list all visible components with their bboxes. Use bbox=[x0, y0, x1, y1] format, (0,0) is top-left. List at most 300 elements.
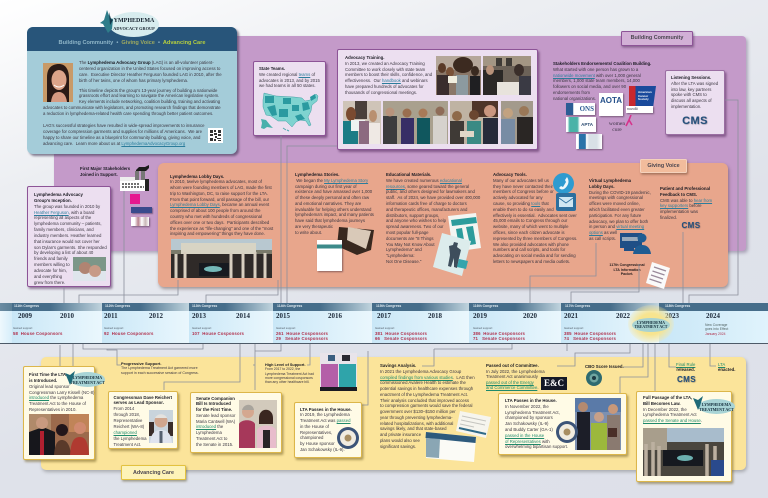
text: lymphedema lobby days: inspiring and empowering" things they have done. bbox=[170, 231, 265, 236]
text: first time LTA introduced: is Introduced. bbox=[29, 378, 57, 383]
logo mark bbox=[65, 371, 75, 385]
text: virtual lobby days: participation. For any future bbox=[589, 213, 641, 218]
text: timeline description: advocates to communicate with legislators, and promoting research findings that demonstrate bbox=[43, 105, 221, 110]
text: high level of support bbox=[265, 363, 314, 384]
text: lymphedema lobby days: Lymphedema Lobby Days. bbox=[170, 174, 224, 178]
text: listening sessions: discuss all aspects of bbox=[671, 98, 712, 103]
image: cosponsor charts bbox=[320, 353, 357, 391]
logo: E&C bbox=[541, 377, 567, 390]
text: patient and professional feedback: Patient and Professional bbox=[660, 186, 710, 191]
text: state teams: advocates in 2013, and by 2015 bbox=[259, 78, 320, 82]
text: lymphedema stories: existence and have amassed over 1,000 bbox=[295, 189, 372, 194]
coverage note 2024: goes into Effect bbox=[705, 327, 728, 331]
text: LAG inception: The group was founded in 2010 by bbox=[34, 204, 100, 209]
text: Reichert lead sponsor: through 2018, bbox=[114, 412, 140, 417]
logo: American Cancer Society bbox=[629, 86, 656, 106]
text: stakeholders endorsements: endorsements from bbox=[553, 90, 590, 95]
text: advocacy training: In 2013, we created an Advocacy Training bbox=[345, 61, 425, 66]
text: lymphedema lobby days: country who met with hundreds of congressional bbox=[170, 214, 262, 219]
text: senate companion bill: for the First Time. bbox=[196, 407, 232, 412]
text: virtual lobby days: which facilitated even greater bbox=[589, 207, 645, 212]
card: LTA passes in the House 2019 bbox=[294, 402, 362, 458]
text: savings analysis: compiled findings from various studies. LAG then bbox=[380, 374, 475, 380]
text: passed out of committee: Passed out of Committee. bbox=[486, 363, 539, 368]
card: congressman Reichert bbox=[108, 391, 178, 449]
text: Reichert lead sponsor: Treatment Act. bbox=[114, 442, 141, 447]
text: LAG inception: Lymphedema Advocacy bbox=[34, 192, 83, 197]
text: intro paragraph: The Lymphedema Advocacy Group (LAG) is an all-volunteer patient- bbox=[79, 60, 214, 65]
logo: women cure: women bbox=[609, 121, 625, 127]
text: LTA passes in the House 2019: Treatment Act was passed bbox=[300, 418, 350, 423]
text: advocacy tools: We also provided advocates with phone bbox=[493, 242, 569, 247]
photo: Senator Cantwell with advocate bbox=[238, 400, 276, 448]
text: LAG inception: family members, clinicians, and bbox=[34, 227, 94, 232]
logo: Lymphedema Advocacy Group bbox=[100, 10, 159, 37]
text: educational materials: "Lymphedema: bbox=[386, 253, 415, 258]
photo: Dave Reichert bbox=[149, 410, 173, 443]
photo: advocates meeting bbox=[483, 56, 531, 95]
logo ellipse: LYMPHEDEMA bbox=[73, 374, 102, 380]
text: strategies paragraph: LAG's successful strategies have resulted in wide-spread improvements to insurance bbox=[43, 123, 205, 128]
text: advocacy tools: actively advocated for any bbox=[493, 195, 543, 200]
text: LTA enacted: enacted. bbox=[718, 367, 735, 372]
text: Reichert lead sponsor: Representative bbox=[114, 418, 142, 423]
text: first time LTA introduced: Treatment Act to the House of bbox=[29, 401, 86, 406]
text: first time LTA introduced: First Time the LTA bbox=[29, 372, 66, 377]
support 116th: Gained support: bbox=[473, 326, 493, 330]
text: full passage of the LTA: Bill Becomes Law. bbox=[643, 401, 681, 406]
text: LAG inception: Heather Ferguson, with a board bbox=[34, 210, 94, 215]
year 2010: 2010 bbox=[60, 312, 74, 320]
heading tab: building community: Building Community bbox=[631, 35, 683, 41]
text: LTA enacted: LTA bbox=[718, 362, 725, 367]
text: LAG inception: that insurance would not cover her bbox=[34, 239, 100, 244]
text: senate companion bill: the Senate in 2015. bbox=[196, 442, 233, 447]
text: state teams bbox=[259, 66, 320, 88]
text: LTA enacted bbox=[718, 363, 735, 373]
logo: American Cancer Society: Cancer bbox=[638, 94, 648, 98]
text: savings analysis: commissioned Avalere Health to estimate the bbox=[380, 380, 466, 385]
text: congressional information packet: LTA Information bbox=[613, 268, 641, 272]
text: LTA passes in the House 2019: Jan Schakowsky (IL-9). bbox=[300, 447, 345, 452]
text: lymphedema stories: to write about. bbox=[295, 230, 322, 234]
text: stakeholders endorsements: What started with one person has grown to a bbox=[553, 67, 638, 72]
text: state teams: State Teams. bbox=[259, 66, 285, 71]
text: CBO score issued: CBO Score Issued. bbox=[585, 364, 624, 369]
text: educational materials: distributors, support groups, bbox=[386, 213, 439, 218]
text: advocacy tools: website, many of which went to multiple bbox=[493, 224, 568, 229]
logo: ONS: ONS bbox=[580, 105, 594, 113]
text: senate companion bill: introduced the bbox=[196, 424, 223, 429]
text: virtual lobby days: Lobby Days. bbox=[589, 184, 615, 189]
text: advocacy tools: Advocacy Tools. bbox=[493, 172, 527, 177]
support 117th: Gained support: bbox=[564, 326, 584, 330]
card: advocacy training bbox=[337, 49, 538, 150]
text: educational materials: Educational Materials. bbox=[386, 172, 431, 177]
timeline bar bbox=[0, 303, 768, 344]
text: lymphedema stories: campaign during our first year of bbox=[295, 184, 357, 188]
logo: CMS: CMS bbox=[682, 115, 708, 127]
text: high level of support: From 2017 to 2022, the bbox=[265, 367, 300, 371]
text: LAG inception: and everything bbox=[34, 274, 62, 279]
text: advocacy tools: 45,000 emails to Congress through our bbox=[493, 218, 567, 223]
text: lymphedema lobby days: In 2010, twelve lymphedema advocates, most of bbox=[170, 179, 262, 184]
text: educational materials: documents are "8 Things bbox=[386, 236, 434, 241]
text: advocacy tools: they have never contacted their bbox=[493, 184, 553, 189]
logo ellipse: LYMPHEDEMA bbox=[702, 402, 731, 406]
text: senate companion bill bbox=[196, 396, 235, 448]
text: savings analysis: Their analysis concluded that improved access bbox=[380, 398, 469, 402]
text: final rule released: released. bbox=[676, 367, 695, 372]
text: patient and professional feedback bbox=[660, 186, 712, 220]
logo ellipse bbox=[70, 372, 105, 387]
text: Reichert lead sponsor bbox=[114, 394, 172, 448]
text: lymphedema lobby days bbox=[170, 174, 274, 236]
support 114th: 261 House Cosponsors bbox=[276, 330, 328, 336]
text: final rule released: Final Rule bbox=[676, 362, 695, 367]
text: educational materials: Not One Disease." bbox=[386, 259, 421, 264]
text: stakeholders endorsements: national organizations. bbox=[553, 96, 596, 100]
text: advocacy tools: letters to newspapers and media outlets. bbox=[493, 259, 570, 264]
text: senate companion bill: Maria Cantwell (WA) bbox=[196, 419, 235, 424]
logo: CMS: CMS bbox=[682, 221, 700, 230]
text: advocacy training bbox=[345, 55, 432, 95]
text: educational materials: You May Not Know About bbox=[386, 242, 435, 247]
card: LTA passes in the House 2022 bbox=[498, 393, 627, 455]
icon: pink ribbon bbox=[625, 115, 633, 126]
text: savings analysis: plans would also see bbox=[380, 438, 420, 443]
text: listening sessions: spoke with CMS to bbox=[671, 92, 707, 97]
text: LTA passes in the House 2022 bbox=[505, 398, 568, 450]
text: stakeholders endorsements: nationwide movement with over 1,000 general bbox=[553, 72, 641, 78]
text: first major stakeholders: First Major Stakeholders bbox=[80, 166, 130, 171]
text: virtual lobby days: During the COVID-19 pandemic, bbox=[589, 190, 651, 195]
header band with tagline: Building Community • Giving Voice • Advancing Care bbox=[59, 40, 205, 46]
text: passed out of committee: In July 2022, the Lymphedema bbox=[486, 368, 545, 374]
badge label ellipse bbox=[632, 318, 670, 332]
text: first time LTA introduced: Congressman Larry Kissell (NC-8) bbox=[29, 390, 94, 395]
text: lymphedema lobby days: whom were founding members of LAG, made the first bbox=[170, 185, 272, 190]
114th congress label: 114th Congress bbox=[277, 304, 302, 308]
text: lymphedema lobby days: offices over one or two days. Participants described bbox=[170, 220, 269, 225]
text: LAG inception: Group's Inception. bbox=[34, 198, 72, 203]
text: lymphedema stories: have said that lymphedema journeys bbox=[295, 218, 365, 223]
logo: white diamond sponsor bbox=[576, 134, 602, 149]
support 116th: 71 Senate Cosponsors bbox=[473, 336, 525, 340]
logo: women cure bbox=[608, 115, 633, 132]
text: educational materials: information cards free of charge to doctors bbox=[386, 201, 467, 206]
logo butterfly mark bbox=[100, 10, 113, 33]
badge label ellipse: LYMPHEDEMA bbox=[637, 320, 665, 324]
text: passed out of committee bbox=[486, 363, 545, 390]
logo: E&C: E&C bbox=[544, 378, 564, 388]
text: full passage of the LTA: In December 2022, the bbox=[643, 407, 687, 412]
text: educational materials: and therapeutic offices, manufacturers and bbox=[386, 207, 467, 212]
logo: AOTA: AOTA bbox=[600, 96, 622, 105]
logo ellipse: TREATMENT ACT bbox=[70, 380, 105, 384]
year 2017: 2017 bbox=[377, 312, 391, 320]
text: advocacy tools: effectively is essential. Advocates sent over bbox=[493, 213, 577, 218]
115th congress label: 115th Congress bbox=[376, 304, 401, 308]
text: progressive support bbox=[121, 362, 199, 375]
text: savings analysis: significant savings. bbox=[380, 444, 416, 448]
coverage note 2024: January 2024 bbox=[705, 332, 726, 336]
text: educational materials: spread awareness. Two of our bbox=[386, 224, 443, 229]
icon: mail bbox=[556, 193, 576, 211]
year 2013: 2013 bbox=[192, 312, 206, 320]
text: LTA passes in the House 2022: passed in the House bbox=[505, 433, 544, 438]
text: LAG inception: advocate for him, bbox=[34, 268, 67, 273]
text: savings analysis: In 2021 the Lymphedema Advocacy Group bbox=[380, 369, 461, 374]
logo badge ellipse bbox=[109, 12, 159, 37]
image: lymphedema body handout bbox=[433, 233, 471, 276]
support 113th bbox=[192, 324, 252, 334]
text: strategies paragraph: advancing care. Learn more about us at LymphedemaAdvocacyGroup.org bbox=[43, 141, 185, 146]
text: full passage of the LTA: Full Passage of the LTA, bbox=[643, 395, 692, 400]
text: Reichert lead sponsor: From 2014 bbox=[114, 406, 134, 411]
support 111th: Gained support: bbox=[13, 326, 33, 330]
year 2018: 2018 bbox=[428, 312, 442, 320]
text: patient and professional feedback: key supporters before bbox=[660, 203, 702, 208]
text: LAG inception: industry members. Heather learned bbox=[34, 233, 101, 238]
photo: twin babies bbox=[73, 257, 106, 281]
text: LTA passes in the House 2022: LTA Passes in the House. bbox=[505, 398, 557, 403]
text: advocacy tools: offices, since each citizen advocate is bbox=[493, 230, 565, 235]
tab: advancing care: Advancing Care bbox=[133, 470, 174, 476]
logo: white sponsor bbox=[131, 217, 149, 226]
text: full passage of the LTA: Lymphedema Treatment Act bbox=[643, 412, 697, 417]
text: savings analysis: potential savings in healthcare expenses through bbox=[380, 386, 473, 391]
text: senate companion bill: Senate lead sponsor bbox=[196, 413, 235, 418]
year 2011: 2011 bbox=[104, 312, 118, 320]
year 2012: 2012 bbox=[149, 312, 163, 320]
photo: lobby day group at Capitol bbox=[171, 239, 272, 278]
text: lymphedema stories: of these deeply personal and often raw bbox=[295, 195, 369, 200]
text: educational materials: most popular full-page bbox=[386, 230, 429, 235]
support 116th: 386 House Cosponsors bbox=[473, 330, 525, 336]
text: virtual lobby days: Virtual Lymphedema bbox=[589, 178, 631, 183]
text: senate companion bill: Senate Companion bbox=[196, 396, 235, 400]
text: LTA passes in the House 2022: Lymphedema Treatment Act, bbox=[505, 410, 560, 415]
text: senate companion bill: Treatment Act to bbox=[196, 436, 227, 441]
text: advocacy training: Advocacy Training. bbox=[345, 55, 384, 60]
support 117th bbox=[564, 324, 624, 340]
text: progressive support: The Lymphedema Treatment Act garnered more bbox=[121, 366, 198, 370]
text: timeline description bbox=[43, 88, 221, 116]
photo: advocates with congressman bbox=[501, 101, 533, 144]
text: intro paragraph: birth of her twins, one of whom has primary lymphedema. bbox=[79, 78, 188, 83]
panel: giving voice bbox=[158, 163, 728, 287]
photo: advocates group bbox=[383, 101, 448, 144]
logo badge ellipse: ADVOCACY GROUP bbox=[113, 26, 155, 31]
card: senate companion bill bbox=[190, 392, 282, 453]
text: high level of support: more congressional cosponsors bbox=[265, 376, 313, 380]
113th congress label: 113th Congress bbox=[192, 304, 217, 308]
text: LAG inception bbox=[34, 192, 107, 285]
text: savings analysis: government over $130–$150 million per bbox=[380, 409, 456, 414]
text: timeline description: Key elements include networking, coalition building, training and activating bbox=[79, 99, 220, 104]
text: LAG inception: grew from there. bbox=[34, 280, 65, 285]
text: advocacy training: Committee to work closely with state team bbox=[345, 66, 425, 72]
logo mark bbox=[693, 396, 703, 410]
card: listening sessions bbox=[665, 70, 725, 135]
panel: building community bbox=[54, 36, 746, 251]
logo: ONS bbox=[566, 103, 595, 115]
support 114th: Gained support: bbox=[276, 326, 296, 330]
support 111th bbox=[13, 326, 63, 336]
logo ellipse bbox=[698, 399, 735, 414]
year 2023: 2023 bbox=[665, 312, 679, 320]
text: lymphedema lobby days: the experience as "life-changing" and one of the "most bbox=[170, 226, 273, 231]
text: stakeholders endorsements: members, 1,000 state team members, 14,000 bbox=[553, 78, 640, 83]
text: timeline description: This timeline depicts the group's 13-year journey of building a nationwide bbox=[79, 88, 217, 92]
heading tab: giving voice bbox=[640, 159, 687, 173]
text: LTA passes in the House 2022: In November 2022, the bbox=[505, 404, 549, 409]
text: Reichert lead sponsor: Reichert (WA-8) bbox=[114, 424, 144, 429]
support 114th: 29 Senate Cosponsors bbox=[276, 336, 328, 340]
support 113th: 107 House Cosponsors bbox=[192, 330, 244, 336]
photo: advocates with bison bbox=[436, 56, 481, 95]
year 2009: 2009 bbox=[18, 312, 32, 320]
photo: advocates shaking hands bbox=[450, 101, 498, 144]
coverage note 2024: New Coverage bbox=[705, 323, 727, 327]
image: story cover bbox=[317, 240, 342, 271]
year 2024: 2024 bbox=[706, 312, 720, 320]
support 115th: Gained support: bbox=[375, 326, 395, 330]
text: progressive support: Progressive Support. bbox=[121, 361, 161, 366]
text: intro paragraph: care. Executive Director Heather Ferguson founded LAG in 2010, after the bbox=[79, 72, 222, 77]
text: Reichert lead sponsor: serves as Lead Sponsor. bbox=[114, 400, 164, 405]
text: progressive support: support in each successive session of Congress. bbox=[121, 371, 199, 375]
text: lymphedema stories: Lymphedema Stories. bbox=[295, 172, 340, 177]
logo: blue sponsor bbox=[131, 207, 152, 213]
text: advocacy tools: cause, so providing tools that bbox=[493, 201, 549, 206]
text: patient and professional feedback: implementation was bbox=[660, 209, 698, 214]
text: advocacy tools: enable them to do so easily and bbox=[493, 207, 554, 212]
text: Reichert lead sponsor: the Lymphedema bbox=[114, 436, 147, 441]
text: LTA passes in the House 2019: by House sponsor bbox=[300, 441, 335, 446]
text: lymphedema stories: and emotional narratives. They are bbox=[295, 201, 361, 206]
text: savings analysis: enactment of the Lymphedema Treatment Act. bbox=[380, 392, 468, 397]
image: savings report page bbox=[456, 410, 491, 438]
text: senate companion bill: Lymphedema bbox=[196, 430, 222, 435]
text: lymphedema lobby days: comprised of about 100 people from around the bbox=[170, 208, 261, 213]
panel: advancing care bbox=[41, 357, 746, 470]
text: congressional information packet: 117th Congressional bbox=[609, 263, 645, 267]
text: first time LTA introduced: Original lead sponsor bbox=[29, 384, 70, 389]
year 2016: 2016 bbox=[328, 312, 342, 320]
text: virtual lobby days: meetings with congressional bbox=[589, 195, 643, 200]
support 112th: Gained support: bbox=[104, 326, 124, 330]
text: advocacy tools: Many of our advocates tell us bbox=[493, 178, 549, 183]
text: LTA passes in the House 2022: and Buddy Carter (GA-1) bbox=[505, 427, 553, 432]
text: listening sessions: implementation. bbox=[671, 104, 701, 109]
support 111th: 58 House Cosponsors bbox=[13, 330, 63, 336]
logo ellipse: TREATMENT ACT bbox=[699, 406, 734, 412]
logo: pink sponsor bbox=[130, 194, 140, 204]
text: virtual lobby days bbox=[589, 178, 651, 241]
support 116th bbox=[473, 324, 533, 340]
heading tab: giving voice: Giving Voice bbox=[647, 163, 680, 169]
text: listening sessions bbox=[671, 75, 718, 109]
text: educational materials: staff. As of 2024, we have provided over 400,000 bbox=[386, 195, 480, 200]
logo: women cure: cure bbox=[612, 126, 622, 132]
photo: executive director bbox=[43, 63, 73, 102]
text: final rule released bbox=[676, 363, 695, 373]
image: story book bbox=[338, 227, 374, 255]
logo: American Cancer Society: Society bbox=[638, 97, 649, 101]
text: educational materials: public, and others designed for lawmakers and bbox=[386, 189, 475, 194]
logo: American Cancer Society: American bbox=[638, 90, 652, 94]
year 2019: 2019 bbox=[473, 312, 487, 320]
text: savings analysis: to compression garments would save the federal bbox=[380, 403, 472, 408]
text: lymphedema lobby days: From that point forward, until passage of the bill, our bbox=[170, 197, 269, 202]
text: timeline description: grassroots effort and learning to navigate the American legislative system. bbox=[79, 93, 219, 98]
year 2021: 2021 bbox=[564, 312, 578, 320]
text: Reichert lead sponsor: championed bbox=[114, 430, 137, 435]
seal: US House bbox=[556, 421, 578, 443]
tab: advancing care bbox=[121, 465, 186, 480]
badge label ellipse: TREATMENT ACT bbox=[635, 325, 667, 329]
logo: Lymphedema Treatment Act bbox=[693, 396, 735, 416]
congress body shading bbox=[0, 310, 768, 342]
year 2022: 2022 bbox=[616, 312, 630, 320]
text: stakeholders endorsements: Stakeholders Endorsements/ Coalition Building. bbox=[553, 61, 651, 66]
text: state teams: We created regional teams of bbox=[259, 72, 315, 77]
text: passed out of committee: passed out of the Energy bbox=[486, 380, 534, 384]
117th congress label: 117th Congress bbox=[565, 304, 590, 308]
text: listening sessions: into law, key partners bbox=[671, 86, 711, 92]
panel: about the Lymphedema Advocacy Group bbox=[27, 27, 237, 154]
year 2015: 2015 bbox=[276, 312, 290, 320]
text: LTA passes in the House 2019: Representatives, bbox=[300, 430, 332, 435]
congress header strip bbox=[0, 303, 768, 310]
icon: virtual meeting bbox=[620, 233, 651, 254]
text: virtual lobby days: options as well bbox=[589, 230, 617, 235]
support 115th: 381 House Cosponsors bbox=[375, 330, 427, 336]
support 117th: 74 Senate Cosponsors bbox=[564, 336, 616, 340]
text: full passage of the LTA: passed the Senate and House. bbox=[643, 418, 702, 423]
icon: factory bbox=[120, 165, 149, 191]
text: first time LTA introduced: Representatives in 2010. bbox=[29, 407, 77, 412]
text: virtual lobby days: offices were moved online, bbox=[589, 201, 640, 206]
year 2020: 2020 bbox=[523, 312, 537, 320]
logo: APTA bbox=[566, 117, 596, 132]
photo: sponsors with advocate bbox=[575, 398, 621, 450]
text: savings analysis: year through preventing lymphedema- bbox=[380, 415, 453, 420]
year 2014: 2014 bbox=[236, 312, 250, 320]
text: advocacy training: have prepared hundreds of advocates for bbox=[345, 84, 424, 89]
116th congress label: 116th Congress bbox=[473, 304, 498, 308]
text: educational materials bbox=[386, 172, 480, 264]
support 112th bbox=[104, 324, 164, 334]
text: advocacy tools bbox=[493, 172, 577, 264]
text: high level of support: High Level of Support. bbox=[265, 363, 306, 367]
photo: advocates with certificate bbox=[343, 101, 381, 144]
text: savings analysis: savings likely, and that state-based bbox=[380, 426, 447, 431]
text: LTA passes in the House 2019: In 2019, the Lymphedema bbox=[300, 412, 350, 417]
text: LAG inception: lymphedema community – patients, bbox=[34, 221, 102, 226]
text: LTA passes in the House 2019 bbox=[300, 406, 352, 453]
support 117th: 385 House Cosponsors bbox=[564, 330, 616, 336]
text: high level of support: Lymphedema Treatment Act had bbox=[265, 372, 314, 376]
text: patient and professional feedback: Feedback to CMS. bbox=[660, 192, 697, 197]
image: savings table bbox=[425, 432, 476, 462]
text: LAG inception: members willing to bbox=[34, 262, 70, 267]
text: passed out of committee: Treatment Act unanimously bbox=[486, 374, 538, 379]
text: first time LTA introduced: introduced the Lymphedema bbox=[29, 395, 83, 400]
text: LAG inception: son Dylan's garments. She responded bbox=[34, 245, 107, 250]
